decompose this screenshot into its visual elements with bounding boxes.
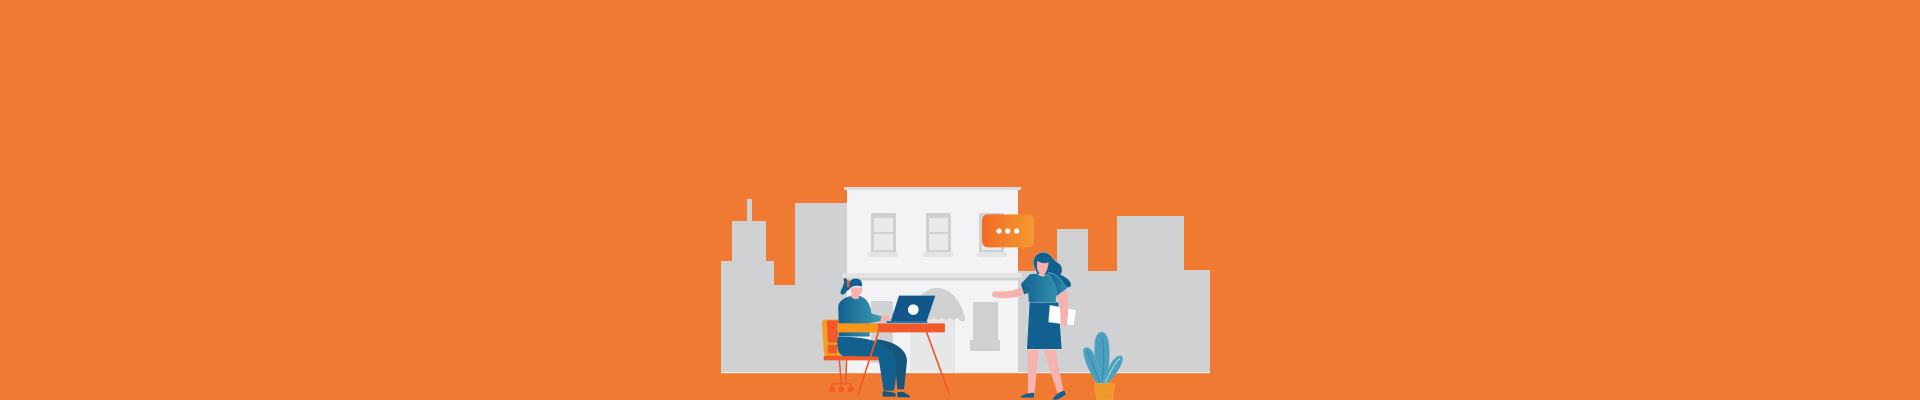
far leg	[877, 339, 907, 389]
near leg and hips	[837, 337, 896, 391]
hand	[881, 315, 891, 321]
leaves	[1095, 332, 1109, 383]
right window pillar	[970, 302, 1000, 351]
torso	[838, 295, 882, 337]
building	[842, 187, 1022, 373]
window 1	[868, 213, 898, 257]
speech bubble	[982, 214, 1034, 250]
person: seated woman with laptop	[822, 278, 949, 397]
skyline: right	[1015, 216, 1210, 373]
shoes	[883, 391, 896, 397]
desk	[837, 323, 949, 396]
plant	[1083, 332, 1123, 400]
awning	[909, 288, 965, 322]
papers	[1049, 305, 1076, 325]
window 3	[977, 213, 1007, 257]
left door panel	[871, 301, 893, 363]
skirt	[1027, 302, 1062, 349]
top	[1021, 273, 1067, 303]
sleeve	[1049, 273, 1067, 295]
near arm	[1057, 289, 1068, 326]
hair tie	[847, 280, 849, 287]
hair back	[1033, 252, 1071, 288]
window 2	[923, 213, 953, 257]
chair	[822, 320, 884, 392]
shoes	[1020, 393, 1034, 398]
laptop	[887, 296, 935, 323]
person: standing woman with papers	[992, 252, 1076, 400]
neck and face	[851, 287, 863, 299]
pot	[1094, 383, 1115, 400]
face	[1037, 261, 1049, 277]
legs	[1028, 348, 1039, 393]
outstretched arm	[992, 286, 1027, 298]
ground line	[721, 372, 1210, 373]
shop door	[910, 318, 955, 372]
skyline: left	[721, 199, 850, 373]
hair	[840, 278, 862, 295]
